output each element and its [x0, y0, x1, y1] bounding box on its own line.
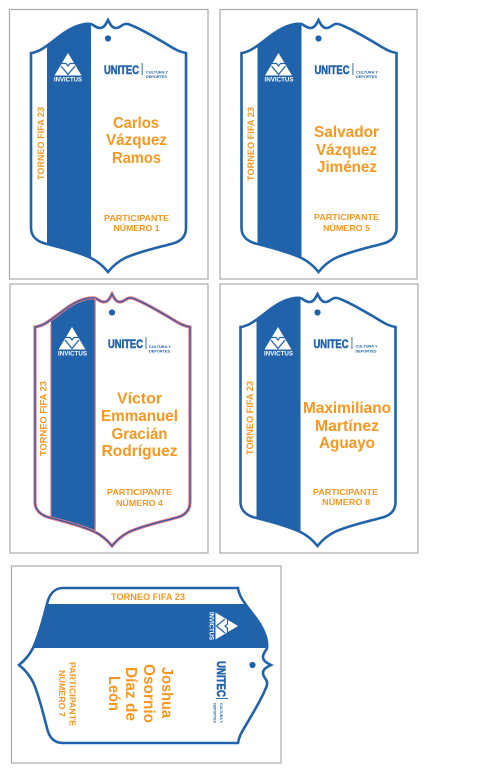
participant number: NÚMERO 8 — [322, 496, 370, 507]
card frame — [10, 284, 208, 553]
participant name: Martínez — [315, 418, 379, 435]
UNITEC logo: CULTURA Y — [219, 703, 224, 723]
top label: TORNEO FIFA 23 — [111, 592, 185, 602]
badge shape — [31, 20, 186, 272]
participant name — [303, 400, 391, 452]
UNITEC logo — [314, 337, 378, 354]
UNITEC logo: UNITEC — [214, 661, 228, 697]
icon: Invictus logo: INVICTUS — [58, 350, 87, 358]
participant number: PARTICIPANTE — [107, 488, 173, 497]
participant name: Ramos — [112, 150, 161, 167]
participant number: NÚMERO 4 — [116, 497, 163, 508]
badge shape — [242, 20, 396, 272]
UNITEC logo — [108, 337, 171, 354]
participant name: Joshua — [158, 667, 175, 718]
badge shape with red cut line — [35, 294, 190, 546]
UNITEC logo: UNITEC — [314, 63, 350, 77]
participant name: León — [105, 676, 122, 711]
card frame — [10, 10, 208, 279]
card: Salvador Vázquez Jiménez — [220, 10, 417, 279]
participant number: NÚMERO 1 — [114, 222, 160, 233]
UNITEC logo: DEPORTES — [146, 74, 167, 79]
participant number — [57, 662, 76, 727]
icon: Invictus logo — [54, 53, 82, 84]
participant name: Jiménez — [317, 159, 377, 176]
UNITEC logo: UNITEC — [108, 337, 143, 351]
participant name: Salvador — [314, 124, 379, 141]
UNITEC logo: CULTURA Y — [356, 344, 378, 348]
icon: Invictus logo — [264, 53, 294, 84]
UNITEC logo: UNITEC — [104, 63, 139, 77]
card: Víctor Emmanuel Gracián Rodríguez — [10, 284, 208, 553]
side label: TORNEO FIFA 23 — [246, 107, 256, 181]
UNITEC logo — [212, 661, 228, 723]
icon: Invictus logo: INVICTUS — [264, 350, 293, 358]
participant name: Víctor — [117, 390, 162, 408]
UNITEC logo: DEPORTES — [149, 348, 170, 354]
icon: Invictus logo — [208, 612, 238, 640]
participant name: Rodríguez — [102, 443, 178, 460]
icon: Invictus logo — [264, 327, 293, 358]
participant name: Osornio — [140, 664, 157, 723]
card frame — [220, 10, 417, 279]
side label: TORNEO FIFA 23 — [245, 381, 255, 455]
participant name: Díaz de — [122, 667, 139, 721]
UNITEC logo: CULTURA Y — [356, 70, 378, 74]
card: Maximiliano Martínez Aguayo — [220, 284, 418, 553]
UNITEC logo — [314, 63, 378, 79]
participant name — [106, 115, 167, 167]
icon: Invictus logo: INVICTUS — [264, 76, 294, 84]
UNITEC logo: CULTURA Y — [149, 344, 171, 349]
participant number: NÚMERO 5 — [323, 222, 370, 233]
participant name: Vázquez — [106, 132, 167, 149]
side label: TORNEO FIFA 23 — [36, 107, 46, 180]
icon: Invictus logo: INVICTUS — [208, 612, 214, 640]
badge shape — [240, 294, 396, 546]
participant number: PARTICIPANTE — [104, 214, 170, 223]
UNITEC logo: CULTURA Y — [146, 70, 168, 74]
badge shape — [19, 588, 271, 743]
participant number — [107, 488, 173, 508]
participant number: NÚMERO 7 — [57, 670, 68, 717]
participant name: Vázquez — [316, 142, 377, 159]
UNITEC logo: DEPORTES — [356, 348, 377, 354]
side label: TORNEO FIFA 23 — [38, 381, 48, 456]
UNITEC logo: DEPORTES — [356, 74, 377, 79]
participant number: PARTICIPANTE — [68, 662, 76, 727]
card: Joshua Osornio Díaz de León (rotated) — [12, 566, 281, 763]
participant name — [101, 390, 178, 460]
card frame — [12, 566, 281, 763]
participant number — [314, 213, 380, 233]
card frame — [220, 284, 418, 553]
card: Carlos Vázquez Ramos — [10, 10, 208, 279]
UNITEC logo — [104, 63, 168, 79]
icon: Invictus logo: INVICTUS — [54, 76, 82, 84]
participant name: Maximiliano — [303, 400, 391, 417]
participant name: Emmanuel — [101, 408, 178, 425]
participant name — [314, 124, 379, 176]
participant number: PARTICIPANTE — [314, 213, 380, 222]
participant name — [105, 664, 175, 723]
participant number — [104, 214, 170, 233]
participant number: PARTICIPANTE — [313, 488, 379, 497]
participant name: Gracián — [112, 426, 168, 443]
participant name: Aguayo — [319, 435, 375, 452]
UNITEC logo: DEPORTES — [212, 703, 218, 723]
participant name: Carlos — [113, 115, 159, 132]
icon: Invictus logo — [58, 327, 87, 358]
UNITEC logo: UNITEC — [314, 337, 349, 351]
participant number — [313, 488, 379, 507]
